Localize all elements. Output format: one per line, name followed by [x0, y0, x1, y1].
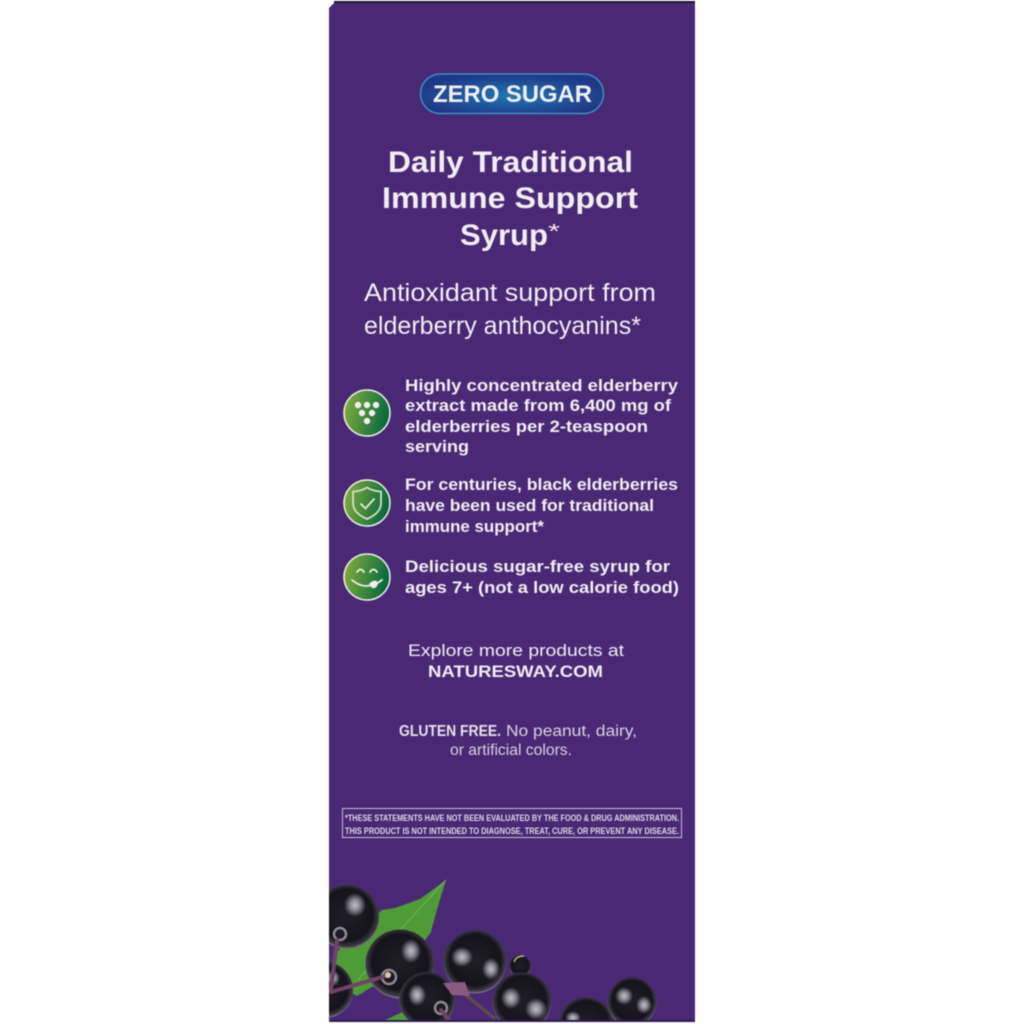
- text: website call to action: [408, 641, 624, 681]
- text: benefit two: have been used for traditional: [405, 497, 654, 515]
- text: allergen statement: GLUTEN FREE.: [399, 723, 501, 740]
- text: benefit one: [405, 377, 679, 456]
- panel: purple box: [329, 1, 695, 1022]
- disclaimer box: THIS PRODUCT IS NOT INTENDED TO DIAGNOSE, TREAT, CURE, OR PREVENT ANY DISEASE.: [345, 826, 679, 837]
- text: allergen statement: No peanut, dairy,: [506, 723, 637, 740]
- text: allergen statement: or artificial colors.: [450, 742, 572, 759]
- disclaimer box: *THESE STATEMENTS HAVE NOT BEEN EVALUATED BY THE FOOD & DRUG ADMINISTRATION.: [345, 813, 679, 824]
- heading: Immune Support: [382, 182, 638, 215]
- text: benefit two: immune support*: [405, 518, 545, 536]
- text: website call to action: Explore more products at: [408, 641, 624, 660]
- heading: Syrup: [460, 219, 548, 252]
- icon: shield with check: [344, 480, 390, 526]
- text: benefit two: For centuries, black elderberries: [405, 476, 678, 494]
- subheading: [364, 279, 656, 340]
- berry calyx details: [334, 928, 447, 1014]
- text: benefit three: [405, 558, 679, 597]
- leaf: [334, 880, 446, 996]
- icon: elderberry cluster: [344, 390, 390, 436]
- text: benefit one: Highly concentrated elderberry: [405, 377, 679, 395]
- text: benefit three: ages 7+ (not a low calorie food): [405, 579, 679, 597]
- text: benefit one: elderberries per 2-teaspoon: [405, 418, 648, 436]
- disclaimer box: [342, 808, 682, 838]
- badge: zero sugar: [420, 74, 604, 114]
- text: website call to action: NATURESWAY.COM: [428, 662, 603, 681]
- heading: Daily Traditional: [388, 146, 633, 179]
- illustration: elderberries and leaves: [297, 880, 656, 1024]
- text: benefit one: serving: [405, 438, 469, 456]
- small berry sheen: [514, 956, 524, 962]
- text: benefit one: extract made from 6,400 mg of: [405, 397, 672, 415]
- icon: smiling face: [344, 554, 390, 600]
- highlights: [326, 893, 652, 1024]
- heading: [382, 146, 638, 252]
- text: benefit two: [405, 476, 678, 536]
- heading: *: [548, 221, 560, 243]
- berries: [328, 884, 657, 1020]
- text: benefit three: Delicious sugar-free syrup for: [405, 558, 671, 576]
- badge: zero sugar: ZERO SUGAR: [433, 81, 592, 108]
- text: allergen statement: [399, 723, 637, 759]
- subheading: elderberry anthocyanins*: [364, 312, 641, 340]
- subheading: Antioxidant support from: [364, 279, 656, 307]
- stems: [331, 940, 494, 1020]
